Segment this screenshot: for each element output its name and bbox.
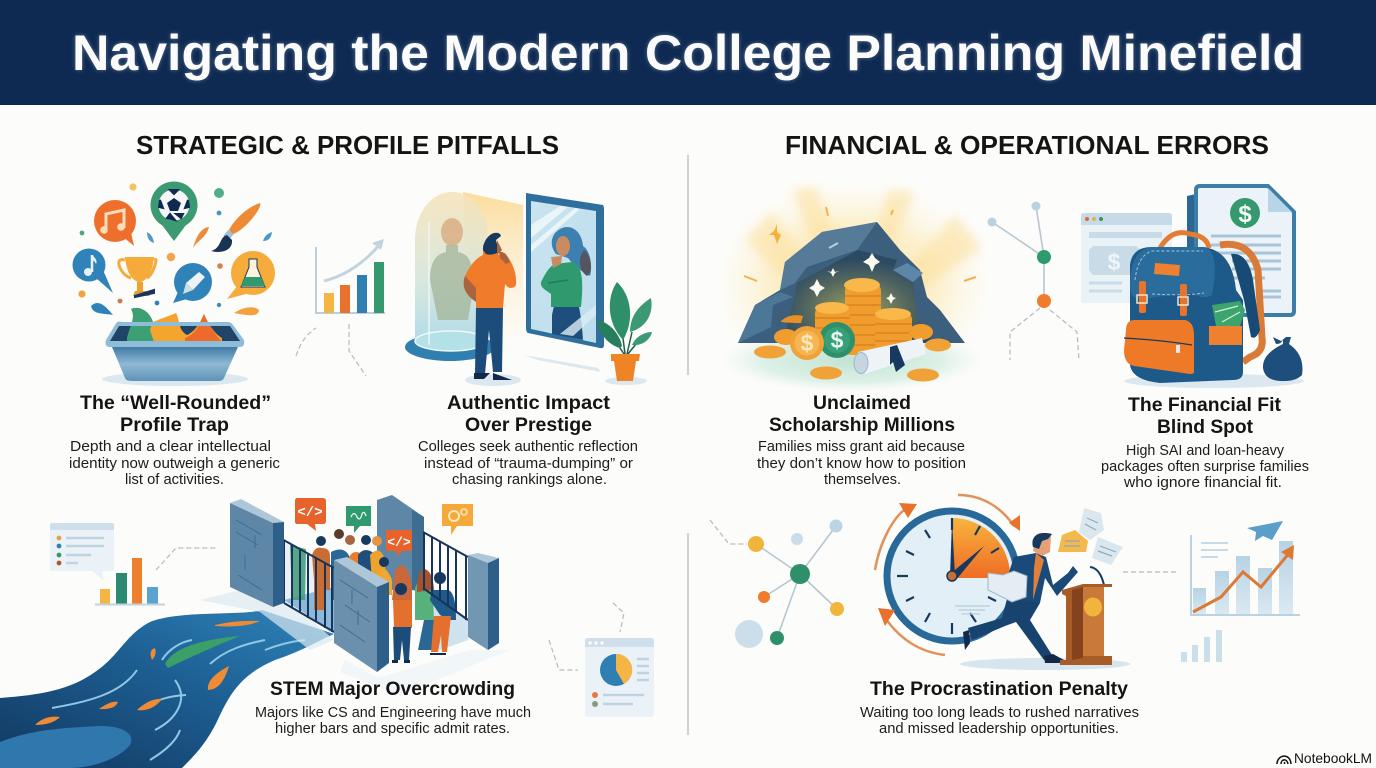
icon: browser window with dollar	[1081, 213, 1172, 303]
heading: financial errors: FINANCIAL & OPERATIONAL ERRORS	[785, 130, 1269, 160]
icon: blue note bubble	[72, 248, 113, 293]
item description: Waiting too long leads to rushed narratives	[860, 705, 1139, 721]
icon: dollar document: $	[1238, 201, 1252, 228]
icon: paintbrush	[211, 203, 260, 252]
item title: The Financial Fit	[1128, 394, 1281, 416]
icon: flying papers	[1058, 508, 1123, 565]
panel: well-rounded profile trap	[69, 182, 385, 488]
item description: Colleges seek authentic reflection	[418, 439, 638, 455]
chart: rising bars with arrow	[1123, 521, 1300, 615]
icon: trophy	[119, 257, 156, 297]
icon: man thinking	[464, 233, 521, 386]
center wall	[334, 557, 389, 672]
icon: dollar coins: $	[801, 330, 814, 356]
title: Navigating the Modern College Planning Minefield	[72, 25, 1304, 81]
coin stacks	[754, 278, 951, 382]
item title: Scholarship Millions	[769, 414, 955, 436]
decorative dots and splashes	[78, 183, 272, 315]
chart: card with bars	[50, 523, 217, 604]
item description: packages often surprise families	[1101, 459, 1309, 475]
arrows around the clock	[875, 495, 1014, 655]
icon: clock with running man	[875, 495, 1130, 670]
icon: bell jar and mirror scene	[405, 192, 652, 386]
item title: Over Prestige	[465, 414, 592, 436]
item title	[447, 392, 611, 436]
panel: financial fit blind spot	[1081, 186, 1304, 388]
item title: Unclaimed	[813, 392, 911, 414]
icon: potted plant	[597, 282, 652, 385]
right pillar	[468, 553, 499, 650]
item title: The Procrastination Penalty	[870, 678, 1128, 700]
panel: unclaimed scholarship millions	[713, 180, 993, 488]
chart: small growth bars	[296, 239, 385, 376]
item title	[1128, 394, 1281, 438]
item description: they don’t know how to position	[757, 456, 966, 472]
item description: identity now outweigh a generic	[69, 456, 280, 472]
item description	[757, 439, 966, 488]
item description	[69, 439, 280, 488]
icon: code and gear speech bubbles: </>	[387, 535, 411, 550]
icon: glowing cave of coins	[713, 180, 993, 392]
item description	[860, 705, 1139, 737]
gate fences	[280, 532, 468, 632]
icon: flask bubble	[227, 251, 275, 299]
item description	[1101, 443, 1309, 491]
item title: Profile Trap	[120, 414, 229, 436]
icon: backpack	[1124, 233, 1304, 388]
sparkles	[809, 253, 896, 304]
icon: code and gear speech bubbles: </>	[297, 505, 323, 521]
item description: chasing rankings alone.	[452, 472, 607, 488]
icon: dollar coins	[790, 322, 855, 360]
icon: overflowing tub with activity bubbles	[72, 182, 275, 386]
icon: soccer ball bubble	[150, 182, 198, 241]
item title: The “Well-Rounded”	[80, 392, 271, 414]
icon: blue marker bubble	[173, 263, 212, 303]
item description: High SAI and loan-heavy	[1126, 443, 1285, 459]
icon: diploma scroll	[854, 338, 926, 374]
panel: procrastination penalty	[710, 495, 1130, 670]
item description: instead of “trauma-dumping” or	[424, 456, 633, 472]
item title: Authentic Impact	[447, 392, 611, 414]
icon: mirror with reflection	[526, 193, 604, 348]
heading: strategic pitfalls: STRATEGIC & PROFILE PITFALLS	[136, 130, 559, 160]
icon: code and gear speech bubbles	[295, 498, 473, 556]
item description: Families miss grant aid because	[758, 439, 965, 455]
item description: Depth and a clear intellectual	[70, 439, 271, 455]
item title	[80, 392, 271, 436]
chart: pie card	[549, 603, 654, 717]
item description: Majors like CS and Engineering have much	[255, 705, 531, 721]
icon: walled gate with crowd	[200, 495, 510, 695]
left wall	[230, 499, 284, 607]
chart: small pale bars	[1181, 630, 1222, 662]
item title	[769, 392, 955, 436]
icon: browser window with dollar: $	[1108, 249, 1121, 275]
panel: authentic impact	[405, 192, 652, 488]
header banner	[0, 0, 1376, 105]
network: connector nodes	[988, 202, 1079, 360]
icon: running man	[960, 533, 1130, 670]
item description: who ignore financial fit.	[1123, 475, 1282, 491]
mirror floor shadow	[524, 355, 601, 372]
item description: themselves.	[824, 472, 901, 488]
item description: higher bars and specific admit rates.	[275, 721, 510, 737]
item description	[255, 705, 531, 737]
network: node cluster	[710, 520, 844, 648]
item title: STEM Major Overcrowding	[270, 678, 515, 700]
icon: orange music bubble	[94, 200, 136, 246]
logo: NotebookLM: NotebookLM	[1294, 750, 1372, 766]
icon: dollar coins: $	[831, 327, 844, 353]
icon: students in line	[290, 529, 456, 663]
item title: Blind Spot	[1157, 416, 1253, 438]
item description: list of activities.	[125, 472, 224, 488]
icon: river	[0, 610, 334, 768]
item description	[418, 439, 638, 488]
panel: stem overcrowding	[0, 495, 654, 768]
icon: clock	[887, 511, 1017, 641]
icon: dollar document	[1187, 186, 1294, 316]
arrowheads	[878, 503, 1020, 626]
icon: podium	[1060, 567, 1112, 665]
item description: and missed leadership opportunities.	[879, 721, 1119, 737]
